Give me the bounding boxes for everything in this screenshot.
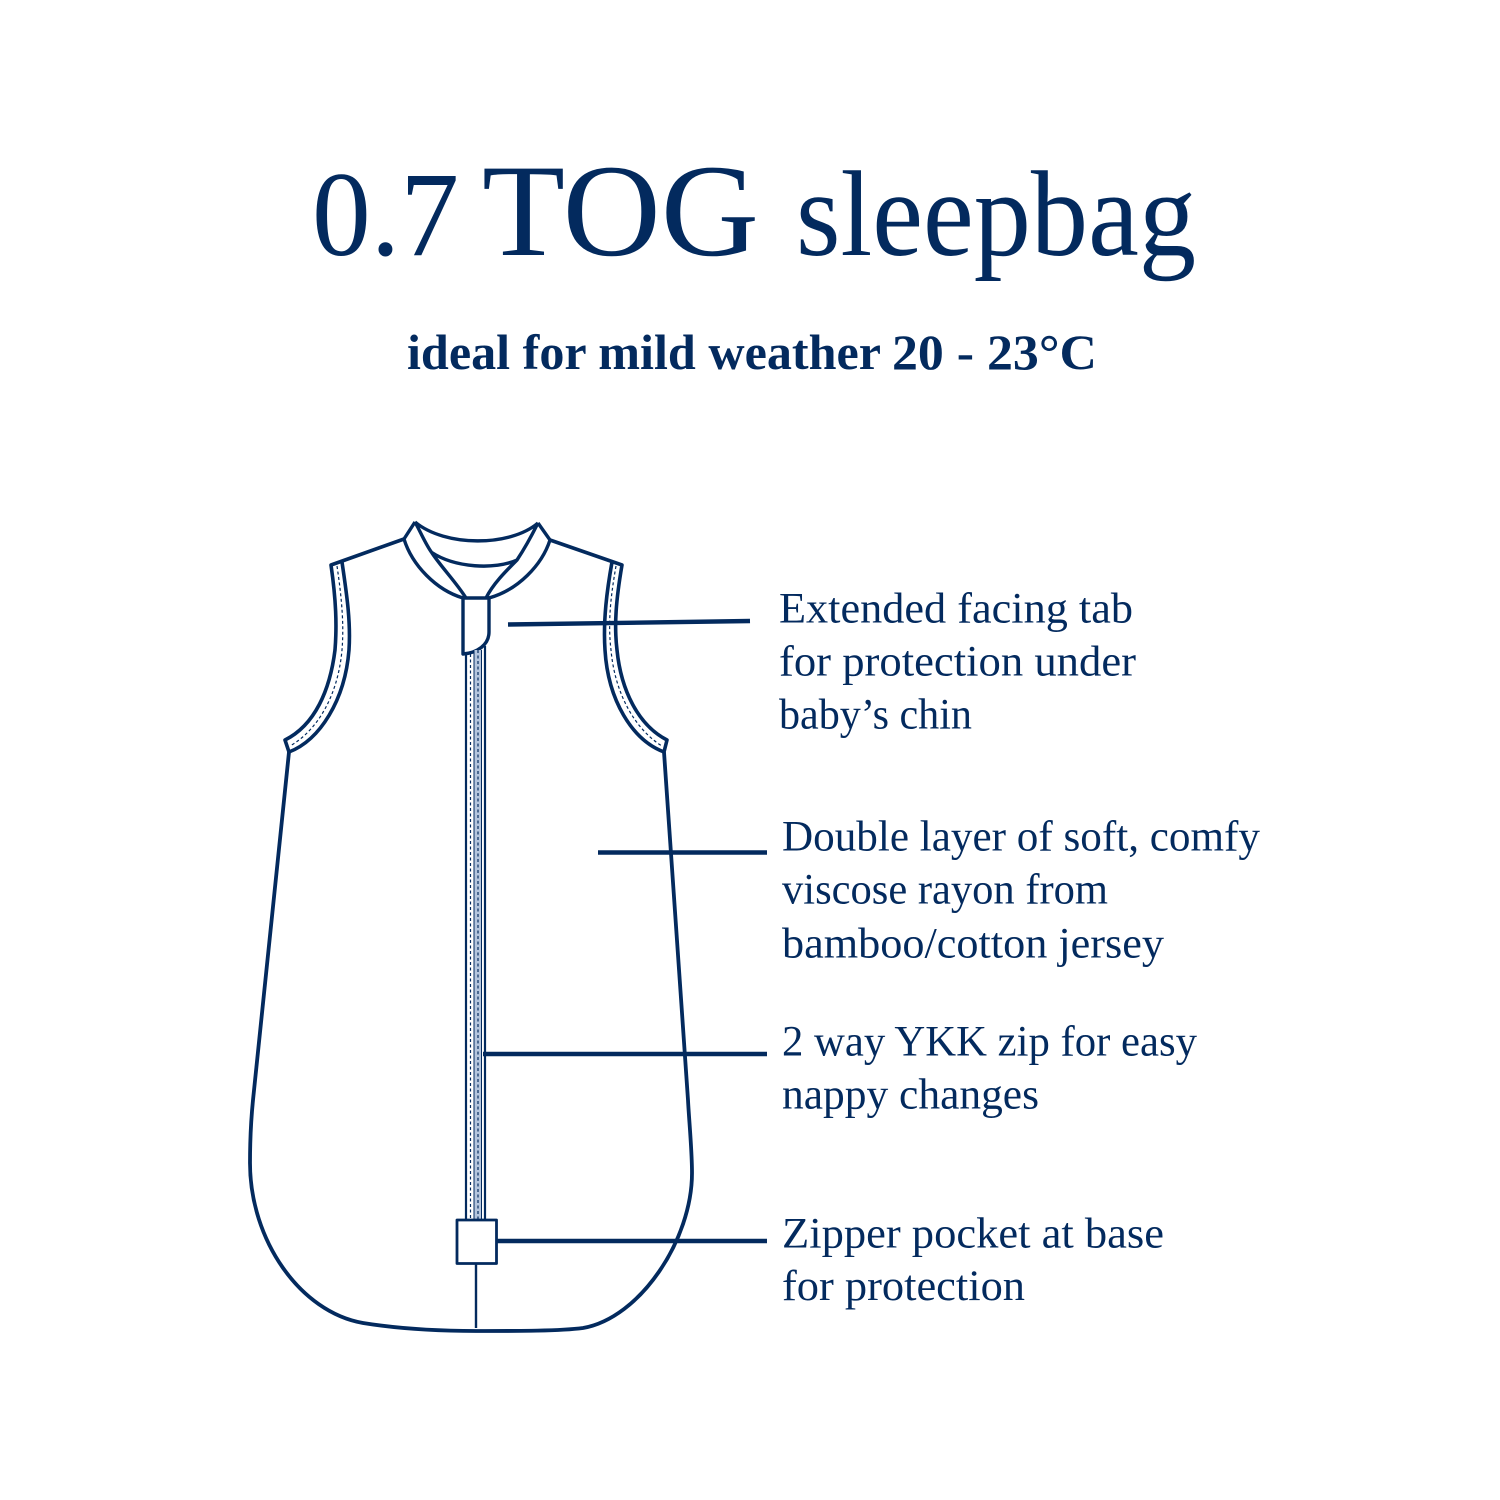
callout text: zip: nappy changes: [782, 1072, 1039, 1118]
callout text: double layer: [782, 814, 1260, 968]
subtitle: 20 - 23°C: [892, 324, 1097, 380]
callout text: double layer: viscose rayon from: [782, 866, 1108, 914]
callout text: facing tab: for protection under: [779, 638, 1136, 686]
callout text: zip: 2 way YKK zip for easy: [782, 1018, 1197, 1066]
callout line: zipper pocket: [497, 1239, 767, 1243]
callout text: facing tab: Extended facing tab: [779, 586, 1133, 632]
title: [312, 137, 1196, 284]
zipper pocket: [457, 1220, 496, 1264]
callout text: double layer: Double layer of soft, comfy: [782, 814, 1260, 860]
armhole stitching: [290, 566, 662, 746]
callout text: zipper pocket: Zipper pocket at base: [782, 1210, 1164, 1258]
callout text: zipper pocket: for protection: [782, 1263, 1025, 1310]
title: sleepbag: [796, 147, 1196, 282]
callout line: zip: [483, 1052, 767, 1056]
extended facing tab: [463, 598, 489, 654]
callout text: facing tab: baby’s chin: [779, 692, 972, 738]
sleepbag illustration: [250, 522, 692, 1331]
centre seam: [475, 1264, 477, 1328]
zip tape fill: [474, 650, 482, 1220]
callout text: zip: [782, 1018, 1197, 1118]
callout text: facing tab: [779, 586, 1136, 738]
body outline: [250, 752, 692, 1331]
subtitle: ideal for mild weather: [407, 324, 881, 380]
callout text: zipper pocket: [782, 1210, 1164, 1310]
callout line: facing tab: [508, 621, 750, 624]
shoulder and left armhole: [285, 539, 404, 752]
callout line: double layer: [598, 850, 767, 855]
zip: [466, 646, 485, 1220]
title: TOG: [482, 137, 759, 284]
shoulder and right armhole: [550, 540, 667, 752]
title: 0.7: [312, 148, 459, 282]
callout text: double layer: bamboo/cotton jersey: [782, 920, 1165, 968]
collar: [404, 522, 550, 598]
subtitle: [407, 324, 1097, 380]
